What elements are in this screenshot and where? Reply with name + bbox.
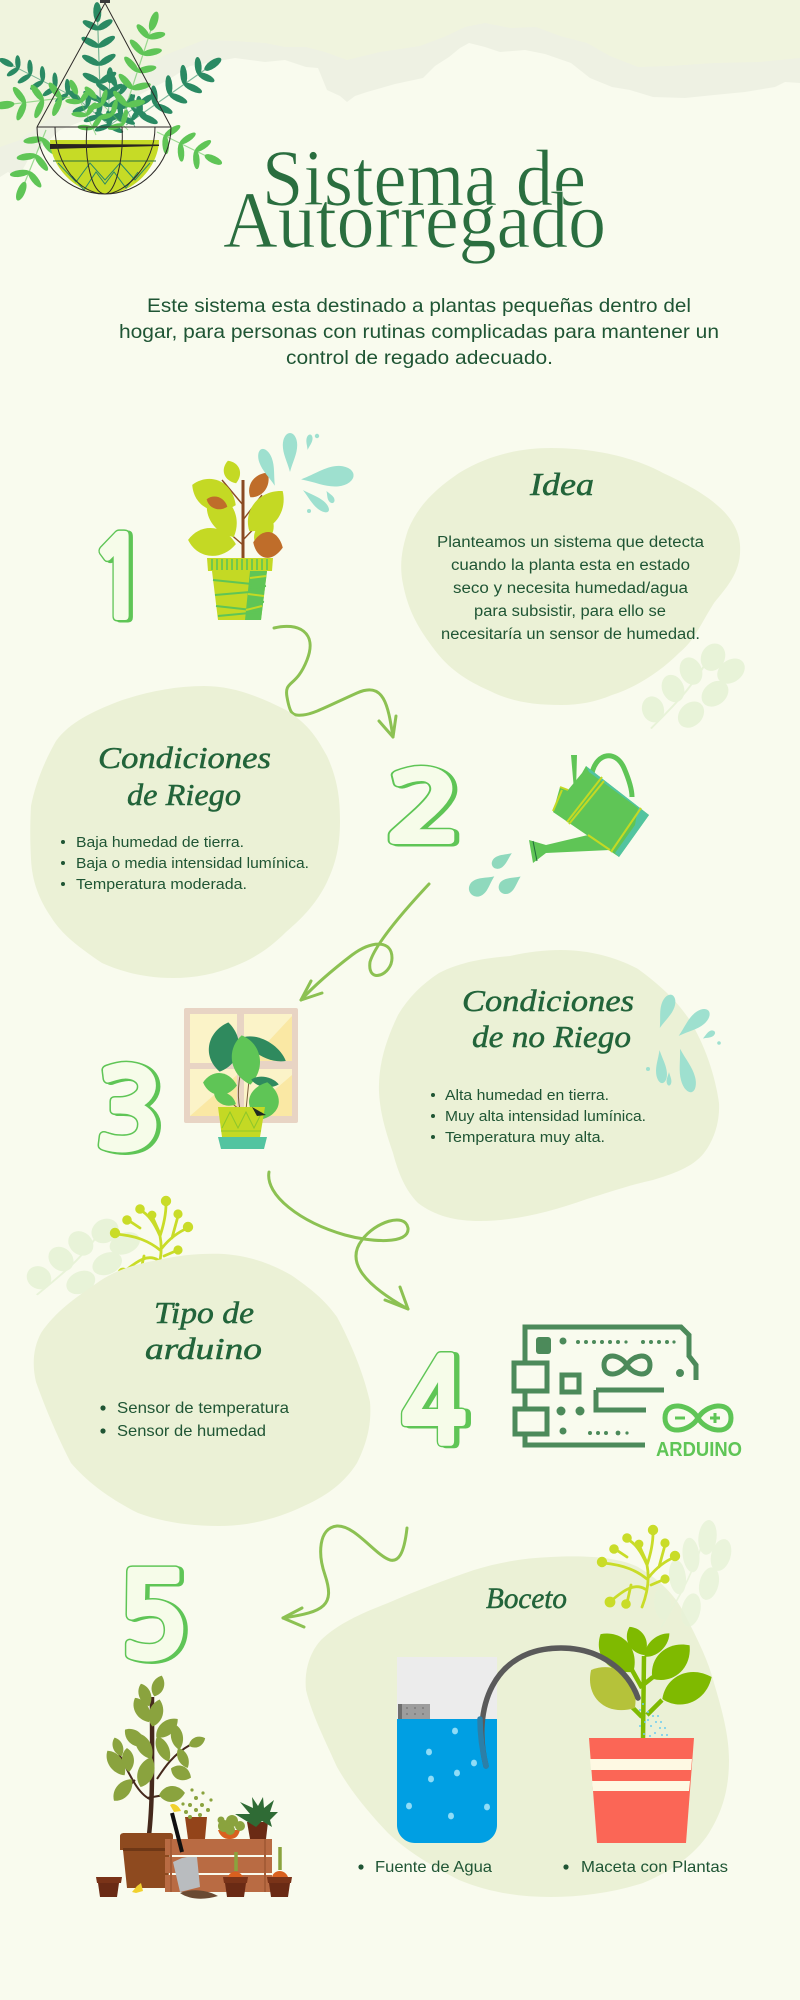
number 3: 3: [95, 1057, 163, 1166]
heading: condiciones de no riego: [462, 983, 634, 1054]
icon: window with plant: [184, 1008, 298, 1149]
intro text: control de regado adecuado.: [286, 347, 553, 369]
icon: garden tools and plants: [96, 1674, 292, 1899]
list: tipo de arduino: Sensor de humedad: [117, 1423, 266, 1440]
text: idea description: cuando la planta esta en estado: [451, 557, 690, 574]
heading: condiciones de no riego: Condiciones: [462, 983, 634, 1018]
number 5: 5: [118, 1561, 188, 1676]
text: idea description: necesitaría un sensor de humedad.: [441, 626, 700, 643]
number 2: 2: [386, 761, 462, 855]
decoration: yellow and pale sprigs above boceto: [598, 1517, 736, 1632]
arrow 3 to 4: [269, 1172, 408, 1309]
heading: idea: Idea: [529, 466, 594, 502]
icon: hanging plant basket: [0, 0, 232, 207]
illustration: hose: [480, 1648, 638, 1766]
list: condiciones de riego: [61, 834, 309, 893]
panel: tipo de arduino: [34, 1254, 370, 1526]
panel: boceto: [306, 1556, 729, 1897]
heading: condiciones de no riego: de no Riego: [472, 1019, 631, 1054]
list: condiciones de no riego: Alta humedad en tierra.: [445, 1087, 609, 1104]
text: idea description: Planteamos un sistema que detecta: [437, 534, 704, 551]
intro text: Este sistema esta destinado a plantas pequeñas dentro del: [147, 295, 691, 317]
icon: arduino board: [514, 1327, 742, 1461]
arrow 4 to 5: [283, 1526, 407, 1627]
number 4: 4: [406, 1346, 470, 1462]
number 4: 4: [402, 1345, 466, 1461]
heading: condiciones de riego: [98, 740, 271, 812]
torn paper header band: [0, 0, 800, 178]
icon: arduino logo: [656, 1406, 742, 1461]
arrow 2 to 3: [301, 884, 429, 1000]
panel: condiciones de no riego: [379, 950, 721, 1221]
number 2: 2: [389, 762, 465, 856]
number 4: 4: [402, 1345, 466, 1461]
list: condiciones de riego: Baja humedad de tierra.: [76, 834, 244, 851]
number 1: 1: [89, 524, 149, 634]
illustration: red flowerpot with plant: [579, 1623, 718, 1843]
list: boceto labels: [358, 1859, 728, 1876]
decoration: pale sprig behind idea panel: [640, 641, 750, 732]
heading: condiciones de riego: Condiciones: [98, 740, 271, 775]
arrow 1 to 2: [274, 626, 396, 737]
heading: tipo de arduino: Tipo de: [154, 1295, 254, 1330]
intro text: [119, 295, 719, 369]
decoration: pale sprig above arduino panel: [24, 1216, 146, 1298]
number 1: 1: [89, 524, 149, 634]
title: Sistema de: [262, 135, 586, 223]
intro text: hogar, para personas con rutinas complicadas para mantener un: [119, 321, 719, 343]
list: tipo de arduino: Sensor de temperatura: [117, 1400, 289, 1417]
heading: tipo de arduino: [145, 1295, 262, 1366]
text: idea description: para subsistir, para ello se: [474, 603, 666, 620]
number 3: 3: [98, 1058, 166, 1167]
list: condiciones de no riego: [431, 1087, 646, 1146]
icon: potted plant with splash: [186, 433, 354, 620]
number 1: 1: [92, 525, 152, 635]
list: boceto labels: Maceta con Plantas: [581, 1859, 728, 1876]
panel: condiciones de riego: [30, 686, 340, 978]
illustration: water tank: [397, 1657, 497, 1843]
list: tipo de arduino: [100, 1400, 289, 1440]
icon: watering can: [466, 755, 649, 900]
title: Autorregado: [223, 177, 606, 265]
icon: arduino logo: ARDUINO: [656, 1439, 742, 1461]
number 5: 5: [118, 1561, 188, 1676]
list: boceto labels: Fuente de Agua: [375, 1859, 492, 1876]
text: idea description: [437, 534, 704, 643]
list: condiciones de riego: Baja o media intensidad lumínica.: [76, 855, 309, 872]
number 5: 5: [121, 1562, 191, 1677]
number 2: 2: [386, 761, 462, 855]
icon: water splash: [646, 993, 721, 1094]
title: [223, 135, 606, 265]
list: condiciones de no riego: Temperatura muy alta.: [445, 1129, 605, 1146]
list: condiciones de riego: Temperatura moderada.: [76, 876, 247, 893]
heading: condiciones de riego: de Riego: [127, 777, 241, 812]
heading: tipo de arduino: arduino: [145, 1331, 262, 1366]
decoration: yellow sprig above arduino panel: [111, 1197, 192, 1278]
text: idea description: seco y necesita humedad/agua: [453, 580, 688, 597]
list: condiciones de no riego: Muy alta intensidad lumínica.: [445, 1108, 646, 1125]
number 3: 3: [95, 1057, 163, 1166]
heading: boceto: Boceto: [486, 1582, 567, 1615]
panel: idea: [401, 448, 740, 705]
